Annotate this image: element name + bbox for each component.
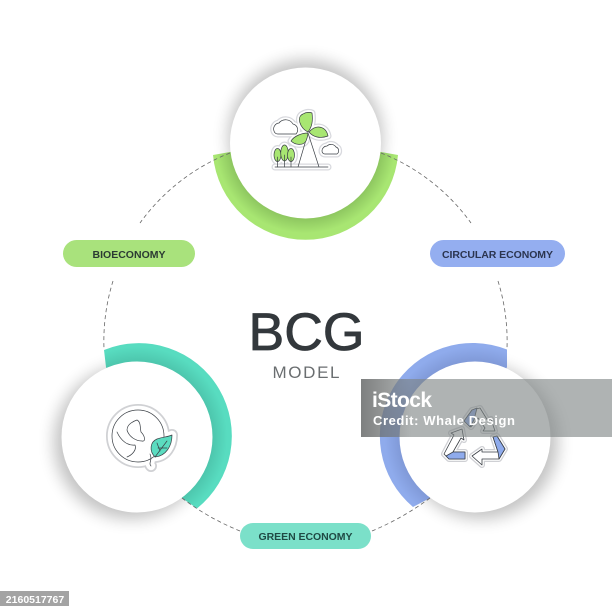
- panel: bioeconomy node: [213, 60, 398, 240]
- label: circular economy: CIRCULAR ECONOMY: [442, 249, 553, 261]
- watermark band: Credit: Whale Design: [373, 413, 515, 428]
- circle shadow: [228, 60, 382, 214]
- white circle: [230, 68, 381, 218]
- watermark band: iStock: [372, 389, 432, 412]
- blue arc: [380, 343, 507, 507]
- image id tag: 2160517767: [6, 594, 64, 606]
- label: circular economy: [430, 240, 565, 267]
- green arc: [213, 143, 398, 240]
- circle shadow: [404, 365, 558, 519]
- icon: globe with leaf: [112, 410, 172, 466]
- label: bioeconomy: BIOECONOMY: [92, 249, 166, 261]
- title: BCG: [248, 303, 364, 362]
- panel: green economy node: [54, 343, 232, 519]
- label: bioeconomy: [63, 240, 195, 267]
- label: green economy: GREEN ECONOMY: [258, 531, 352, 543]
- icon: recycling arrows: [444, 408, 505, 465]
- image id tag: [0, 591, 69, 606]
- label: green economy: [240, 523, 371, 549]
- dashed ring connectors: [104, 153, 507, 531]
- white circle: [62, 362, 212, 512]
- circle shadow: [54, 365, 208, 519]
- teal arc: [104, 343, 232, 508]
- white circle: [400, 362, 550, 512]
- icon: wind turbine and trees: [274, 112, 339, 167]
- watermark band: [361, 379, 612, 437]
- panel: circular economy node: [380, 343, 558, 519]
- subtitle: MODEL: [272, 363, 340, 382]
